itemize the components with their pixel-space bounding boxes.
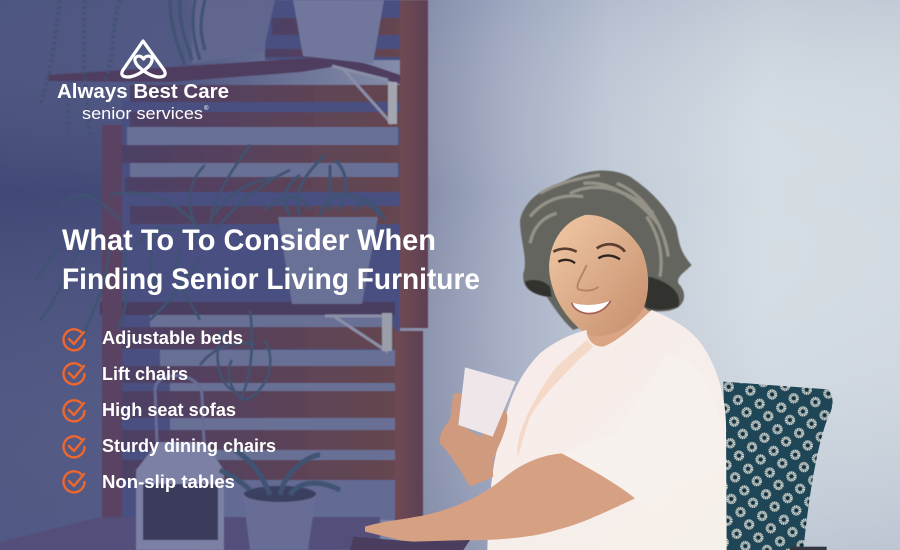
wooden shelf unit xyxy=(0,0,428,550)
chest skin xyxy=(517,340,593,457)
smile xyxy=(572,301,611,313)
face xyxy=(549,215,648,336)
nose xyxy=(577,265,598,291)
item: adjustable beds xyxy=(64,328,243,350)
wooden table corner xyxy=(350,537,470,550)
metal brackets xyxy=(325,66,392,352)
title: Finding Senior Living Furniture xyxy=(62,263,480,296)
hair highlights xyxy=(530,175,668,277)
checklist xyxy=(64,328,276,492)
chair frame xyxy=(790,547,827,550)
wrist hand xyxy=(440,393,507,487)
item: sturdy dining chairs: Sturdy dining chairs xyxy=(102,436,276,456)
item: non-slip tables: Non-slip tables xyxy=(102,472,235,492)
item: high seat sofas: High seat sofas xyxy=(102,400,236,420)
dark hair ends xyxy=(525,277,679,310)
logo tagline: senior services xyxy=(82,105,203,123)
lower front post xyxy=(395,331,423,521)
front post xyxy=(400,0,428,328)
cushion xyxy=(720,382,833,550)
shirt xyxy=(487,310,727,550)
pots xyxy=(136,0,384,550)
sleeve xyxy=(562,353,723,512)
title xyxy=(62,224,480,296)
arm xyxy=(365,453,635,543)
eyebrows and eyes xyxy=(553,244,625,252)
cup xyxy=(458,367,516,437)
logo name: Always Best Care xyxy=(57,80,229,103)
plants xyxy=(35,0,385,495)
logo xyxy=(57,41,229,123)
back hair xyxy=(520,170,692,330)
woman xyxy=(350,170,833,550)
registered mark: ® xyxy=(204,105,209,112)
item: adjustable beds: Adjustable beds xyxy=(102,328,243,348)
lantern xyxy=(136,442,224,550)
bottom table xyxy=(0,517,380,550)
neck xyxy=(587,307,652,347)
rear post xyxy=(102,125,122,520)
middle shelf board xyxy=(100,302,395,315)
title: What To To Consider When xyxy=(62,224,436,257)
item: lift chairs xyxy=(64,363,188,384)
item: lift chairs: Lift chairs xyxy=(102,364,188,384)
top shelf board xyxy=(48,55,400,84)
logo icon xyxy=(122,41,165,77)
